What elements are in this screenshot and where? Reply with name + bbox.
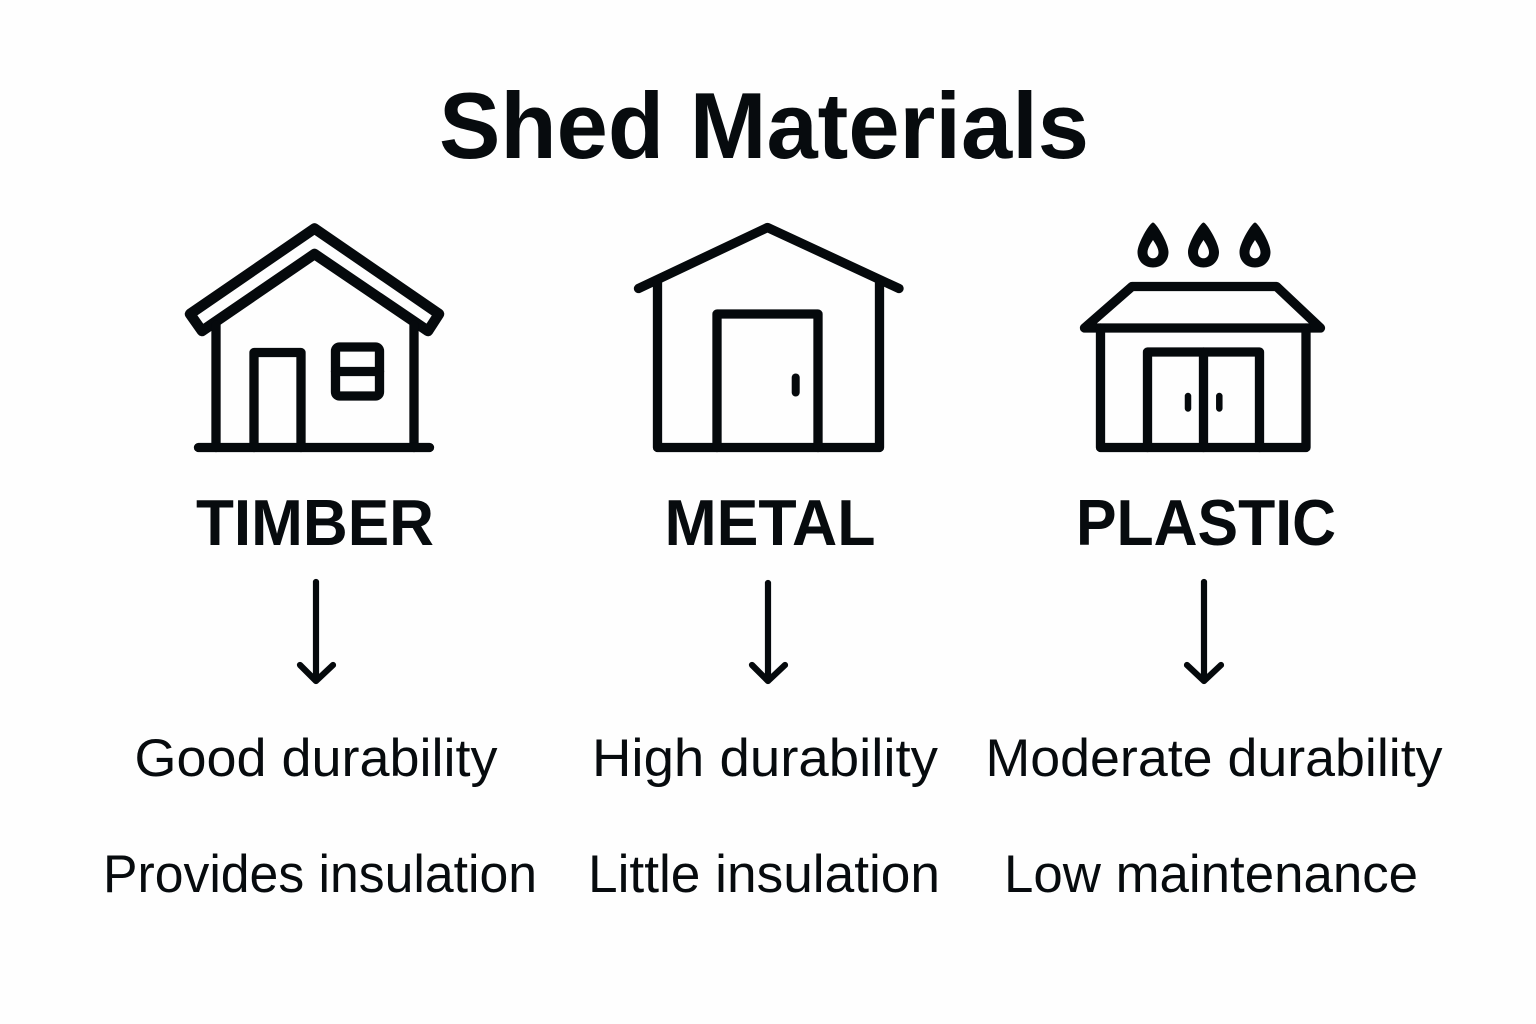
icon: metal shed xyxy=(638,228,899,448)
text: high durability: High durability xyxy=(592,729,939,788)
heading: plastic: PLASTIC xyxy=(1076,486,1336,559)
title: Shed Materials xyxy=(439,73,1089,178)
heading: metal: METAL xyxy=(664,486,876,559)
arrow: metal xyxy=(752,583,785,681)
icon: water drops xyxy=(1138,222,1270,268)
heading: timber: TIMBER xyxy=(196,486,434,559)
arrow: plastic xyxy=(1187,582,1221,681)
arrow: timber xyxy=(300,582,333,681)
text: good durability: Good durability xyxy=(134,729,498,788)
text: little insulation: Little insulation xyxy=(588,845,940,904)
text: moderate durability: Moderate durability xyxy=(986,729,1443,788)
icon: plastic shed xyxy=(1084,222,1320,448)
text: provides insulation: Provides insulation xyxy=(103,845,537,904)
icon: timber house xyxy=(190,228,439,448)
text: low maintenance: Low maintenance xyxy=(1004,845,1418,904)
